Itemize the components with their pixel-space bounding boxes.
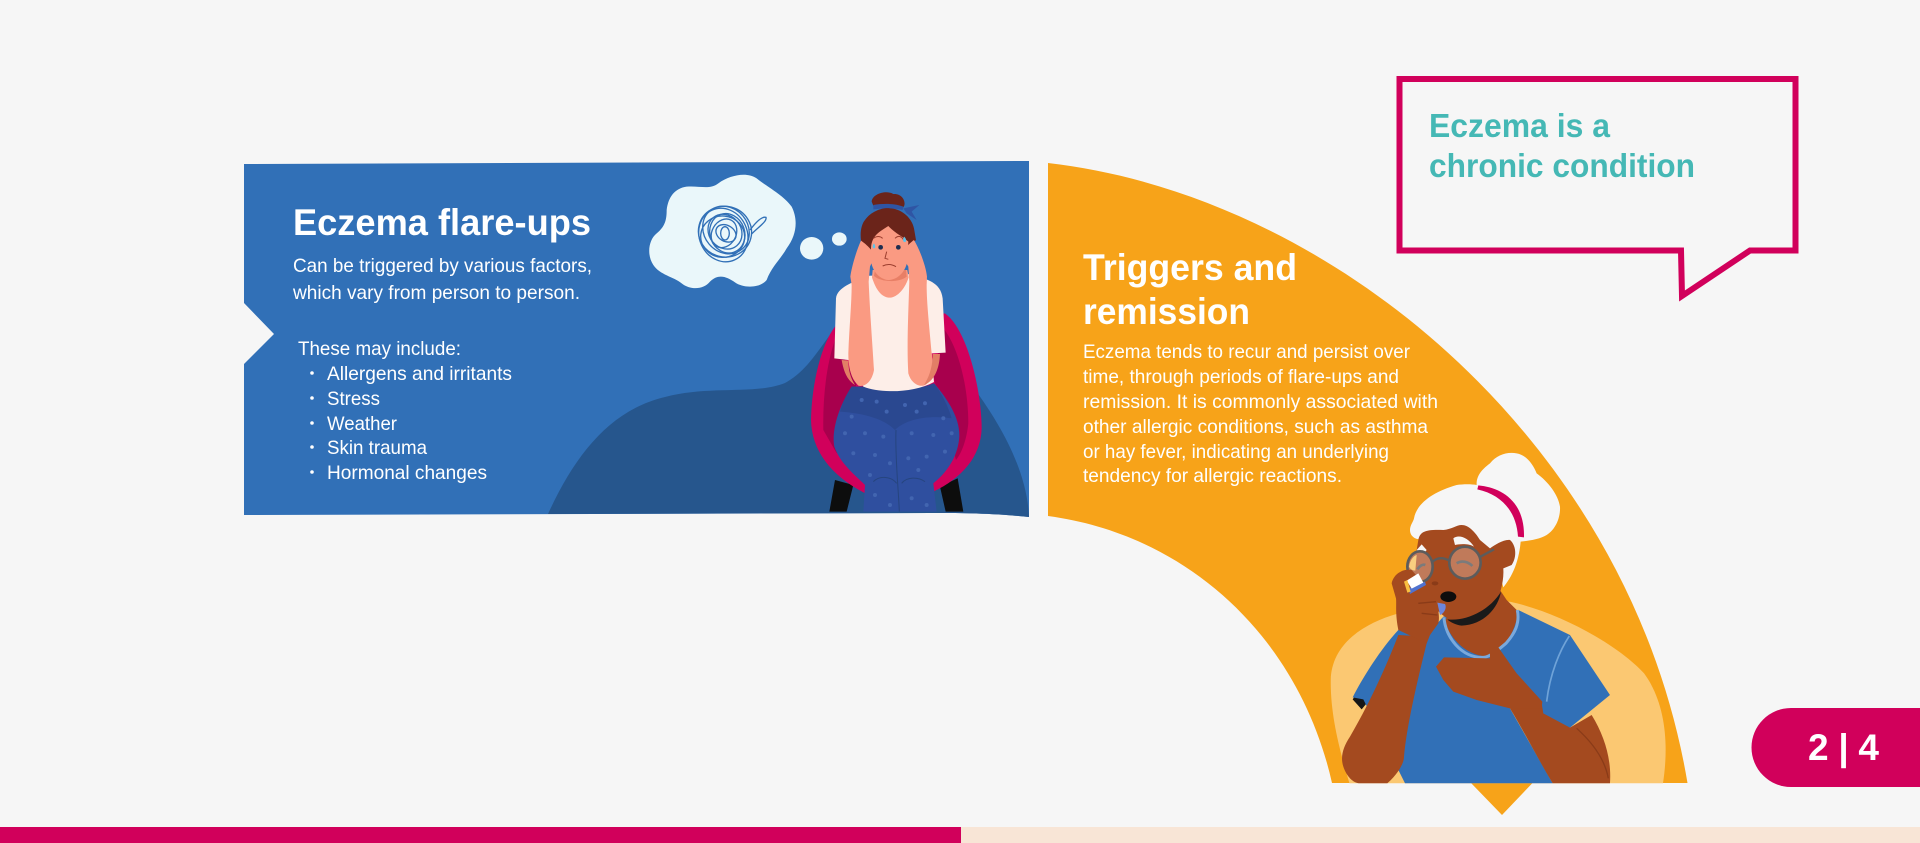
- progress bar: [0, 827, 1920, 843]
- trouser dots: [843, 398, 954, 507]
- trigger list: Stress: [327, 388, 380, 410]
- glasses: [1407, 547, 1494, 582]
- left arm: [1342, 635, 1428, 783]
- lower face and hands: [1392, 570, 1542, 708]
- arm shadows: [842, 354, 940, 385]
- trigger list: These may include:: [298, 338, 461, 360]
- intro text: [292, 255, 592, 304]
- intro text: which vary from person to person.: [292, 282, 580, 304]
- eyes and mouth: [873, 236, 906, 267]
- body text: Eczema tends to recur and persist over: [1083, 341, 1410, 363]
- body text: other allergic conditions, such as asthma: [1083, 416, 1428, 438]
- chin shadow: [874, 270, 907, 281]
- hair ribbon: [873, 204, 919, 220]
- trigger list: Skin trauma: [327, 437, 427, 459]
- headband: [1477, 485, 1524, 537]
- shirt: [834, 274, 946, 391]
- heading: [1083, 247, 1297, 332]
- choker shadow: [1447, 592, 1501, 626]
- hair: [1410, 453, 1560, 587]
- trigger list: [298, 338, 512, 484]
- trouser folds: [873, 430, 925, 512]
- collar: [1444, 610, 1518, 657]
- sleeve underside: [1353, 696, 1369, 709]
- panel: triggers and remission: [1048, 163, 1688, 815]
- raised hand: [1392, 570, 1439, 643]
- trigger list: Allergens and irritants: [327, 363, 512, 385]
- neck: [872, 270, 909, 298]
- intro text: Can be triggered by various factors,: [293, 255, 592, 277]
- panel: eczema flare-ups: [244, 161, 1029, 517]
- chair inner: [823, 328, 968, 460]
- heading: Triggers and: [1083, 247, 1297, 288]
- callout text: [1429, 107, 1695, 184]
- chair: [811, 313, 982, 493]
- finger details: [1418, 602, 1437, 615]
- hair: [861, 208, 916, 258]
- chair legs: [829, 478, 963, 512]
- head: [1407, 525, 1515, 624]
- progress filled: [0, 827, 961, 843]
- body text: tendency for allergic reactions.: [1083, 465, 1342, 487]
- callout text: chronic condition: [1429, 147, 1695, 184]
- body text: time, through periods of flare-ups and: [1083, 366, 1399, 388]
- panel background: [244, 161, 1029, 517]
- hair tuft: [1417, 536, 1474, 557]
- mouthpiece: [1437, 603, 1446, 615]
- hands and forearms: [848, 241, 875, 386]
- page indicator: [1752, 708, 1920, 787]
- nose: [1432, 581, 1438, 585]
- illustration: worried woman on chair: [811, 192, 982, 512]
- pill background: [1752, 708, 1920, 787]
- trouser lap shading: [840, 383, 952, 430]
- callout: eczema is a chronic condition: [1400, 79, 1796, 296]
- page number: 2 | 4: [1808, 727, 1879, 769]
- heading: Eczema flare-ups: [293, 202, 591, 243]
- callout text: Eczema is a: [1429, 107, 1611, 144]
- face: [1413, 525, 1515, 624]
- shirt: [1353, 610, 1610, 783]
- body text: [1083, 341, 1438, 487]
- sleeve seam: [1547, 636, 1569, 702]
- progress remaining: [961, 827, 1920, 843]
- inhaler: [1404, 573, 1426, 594]
- cream blob: [1331, 601, 1666, 783]
- orange arc shape: [1048, 163, 1688, 815]
- hair bun: [872, 192, 905, 207]
- speech bubble outline: [1400, 79, 1796, 296]
- body text: or hay fever, indicating an underlying: [1083, 441, 1389, 463]
- arm fold: [1577, 728, 1608, 778]
- illustration: woman using inhaler: [1331, 453, 1666, 783]
- body text: remission. It is commonly associated with: [1083, 391, 1438, 413]
- right arm: [1510, 703, 1610, 783]
- mouth: [1440, 591, 1456, 602]
- trigger list: Weather: [327, 413, 397, 435]
- icon: thought bubble with scribble: [649, 175, 847, 288]
- trousers: [834, 383, 959, 512]
- trigger list: Hormonal changes: [327, 462, 487, 484]
- body: [1342, 590, 1610, 783]
- heading: remission: [1083, 291, 1250, 332]
- face: [871, 226, 908, 280]
- background hill: [548, 335, 1029, 517]
- neck: [1443, 590, 1518, 657]
- chest hand: [1436, 647, 1542, 708]
